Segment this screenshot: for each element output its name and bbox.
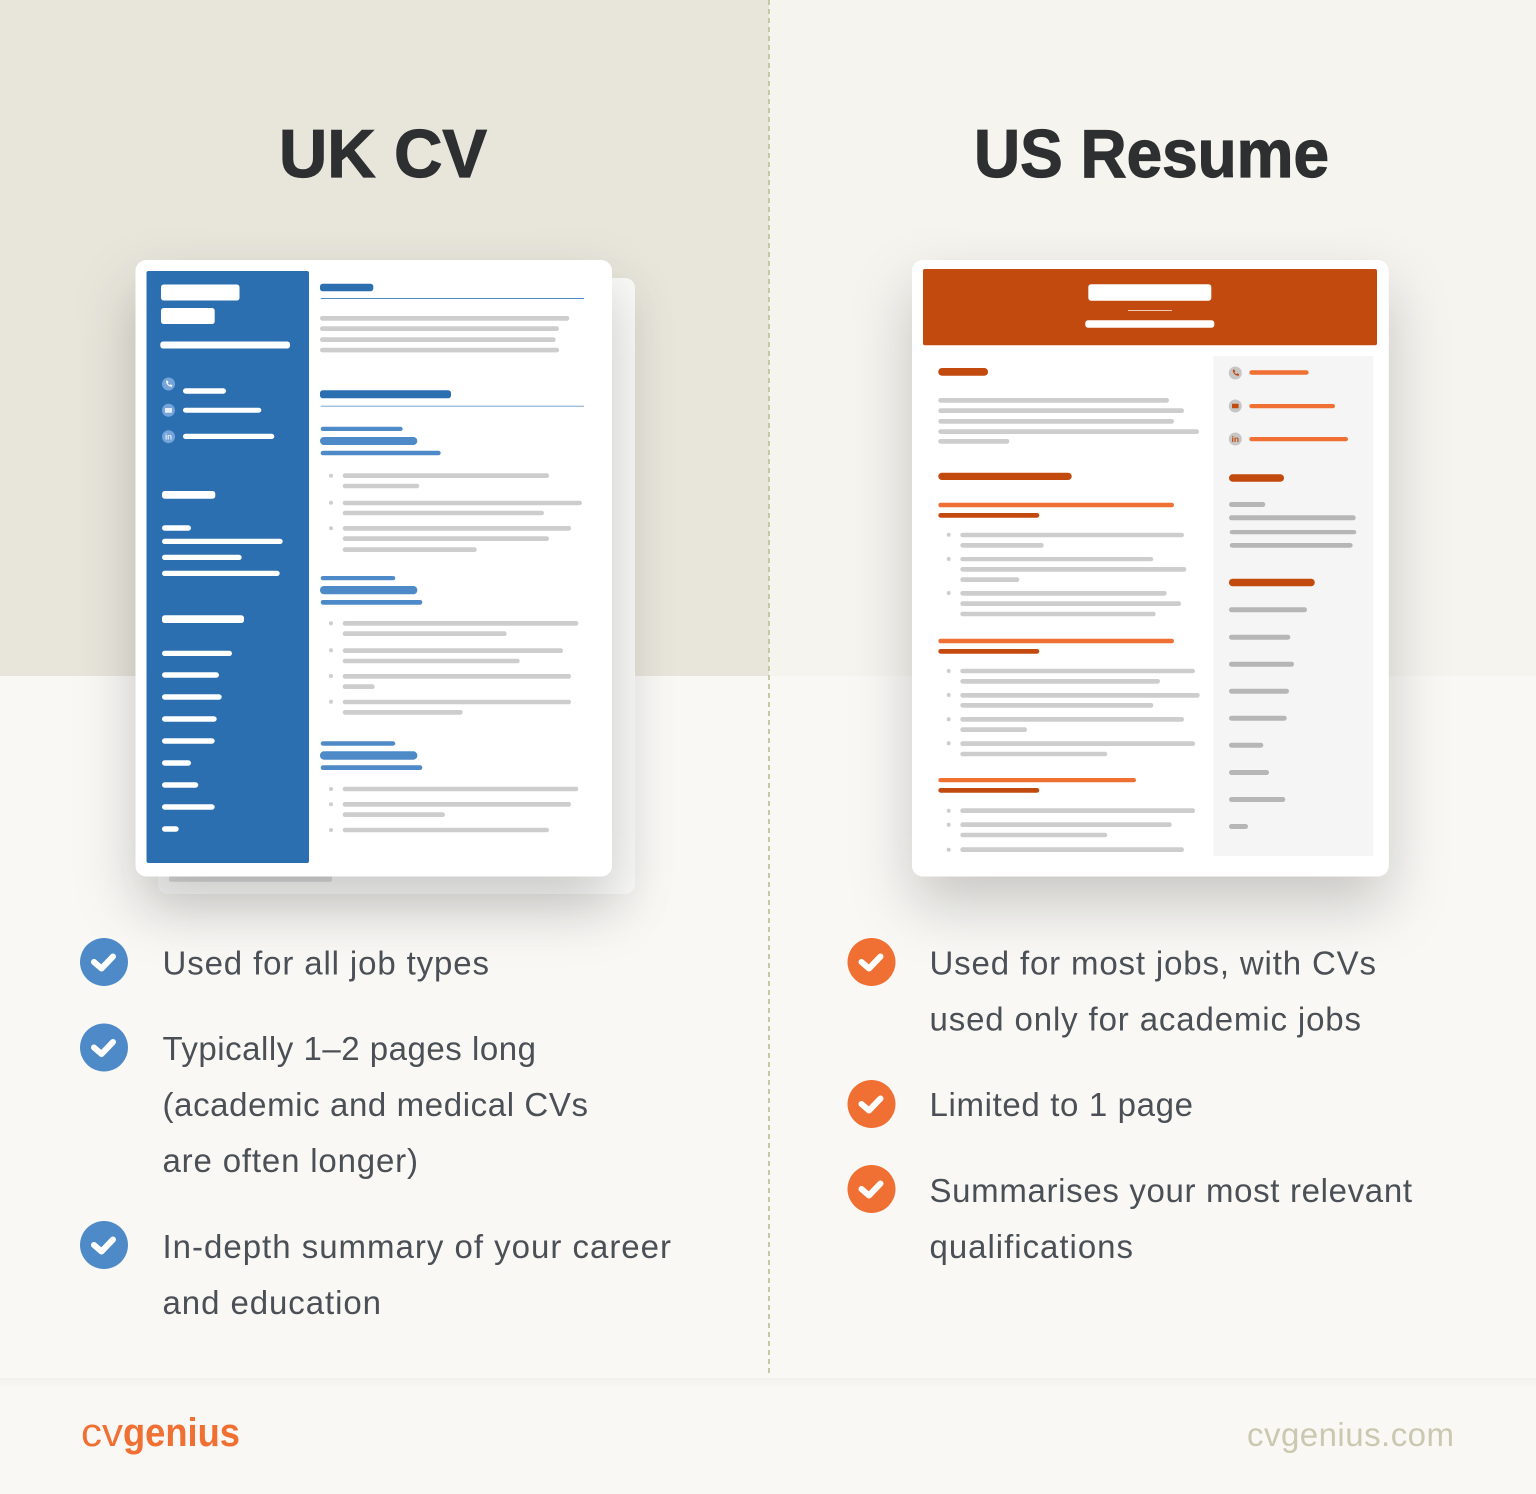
logo: cvgenius: genius bbox=[123, 1411, 240, 1455]
website address: cvgenius.com bbox=[1247, 1416, 1454, 1453]
point: in-depth summary: In-depth summary of your career bbox=[162, 1228, 671, 1265]
icon: linkedin: in bbox=[1232, 434, 1239, 444]
logo: cvgenius bbox=[81, 1411, 240, 1455]
point: all job types bbox=[80, 938, 489, 986]
point: most jobs: Used for most jobs, with CVs bbox=[930, 944, 1376, 982]
heading: UK CV: UK CV bbox=[279, 116, 487, 192]
resume sidebar bbox=[1213, 356, 1373, 856]
point: page length: Typically 1–2 pages long bbox=[162, 1030, 536, 1067]
icon: phone bbox=[162, 378, 175, 390]
back page of CV bbox=[158, 278, 635, 894]
point: relevant qualifications: qualifications bbox=[930, 1228, 1133, 1265]
point: page length: (academic and medical CVs bbox=[162, 1086, 588, 1123]
resume page bbox=[912, 260, 1389, 876]
icon: phone bbox=[1229, 366, 1242, 380]
panel: US Resume document illustration bbox=[912, 260, 1389, 876]
point: one page: Limited to 1 page bbox=[930, 1086, 1193, 1123]
point: one page bbox=[848, 1080, 1193, 1128]
panel: UK CV document illustration bbox=[136, 260, 635, 894]
CV sidebar bbox=[146, 271, 309, 863]
icon: linkedin bbox=[1229, 432, 1242, 446]
point: relevant qualifications bbox=[848, 1165, 1412, 1265]
point: relevant qualifications: Summarises your most relevant bbox=[930, 1172, 1412, 1209]
point: most jobs: used only for academic jobs bbox=[930, 1000, 1361, 1038]
icon: email bbox=[162, 404, 175, 417]
icon: linkedin bbox=[162, 430, 175, 443]
point: in-depth summary bbox=[80, 1221, 671, 1321]
point: page length bbox=[80, 1024, 588, 1179]
list: US Resume points bbox=[848, 938, 1412, 1265]
point: most jobs bbox=[848, 938, 1376, 1038]
point: page length: are often longer) bbox=[162, 1142, 418, 1179]
list: UK CV points bbox=[80, 938, 671, 1321]
resume main column bbox=[938, 368, 1200, 852]
front page of CV bbox=[136, 260, 612, 876]
resume header band bbox=[923, 269, 1377, 345]
CV main column bbox=[320, 284, 584, 832]
icon: email bbox=[1229, 400, 1242, 412]
point: all job types: Used for all job types bbox=[162, 944, 489, 982]
icon: linkedin: in bbox=[165, 432, 172, 442]
point: in-depth summary: and education bbox=[162, 1284, 381, 1321]
heading: US Resume: US Resume bbox=[974, 116, 1329, 192]
logo: cvgenius: cv bbox=[81, 1411, 123, 1455]
